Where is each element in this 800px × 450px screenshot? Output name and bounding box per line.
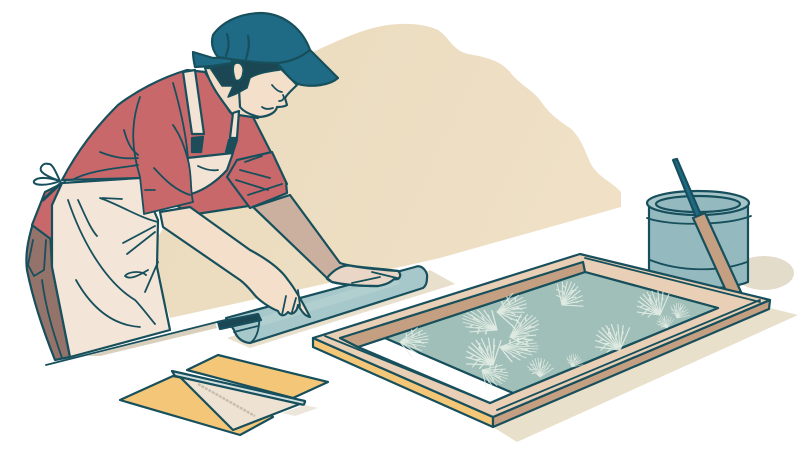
cap visor [277,50,338,86]
frame shadow [493,308,798,442]
mesh [385,272,718,393]
apron straps [183,70,239,152]
inner bar [340,262,585,347]
apron skirt [52,178,170,357]
person [26,68,400,360]
right sleeve cuff [227,152,287,208]
front arm and hand [160,207,310,317]
envelope and paper [120,355,328,435]
apron tie bow [34,164,61,200]
shirt sleeve [133,83,193,214]
torso shirt [62,70,287,215]
head tie [193,52,232,67]
hair [210,61,280,97]
window [358,338,513,403]
blade [693,213,741,293]
background beige blob [150,24,621,318]
face [238,66,297,117]
table edge with shadow [46,292,340,365]
roll [218,266,455,348]
apron bib [187,153,233,194]
stick [673,159,701,217]
neck [205,68,258,118]
fronds [398,277,691,391]
cap seams [226,34,249,59]
ear [233,63,243,81]
bucket [647,159,794,293]
trouser seams [28,240,62,358]
back arm [253,195,400,286]
trousers [26,223,70,360]
apron folds [68,198,158,327]
facial features [262,85,284,109]
frame top [313,254,770,417]
cap dome [212,13,310,63]
frame [313,254,798,442]
outer bar detail [497,300,760,410]
roll body [226,266,427,343]
head [193,13,338,117]
roll shadow [227,270,455,348]
yellow side [313,338,493,427]
dark squeegee edge [218,314,261,329]
earring [235,80,241,90]
right side [493,300,770,427]
back shirt hem [32,182,65,240]
shirt folds [72,125,190,195]
